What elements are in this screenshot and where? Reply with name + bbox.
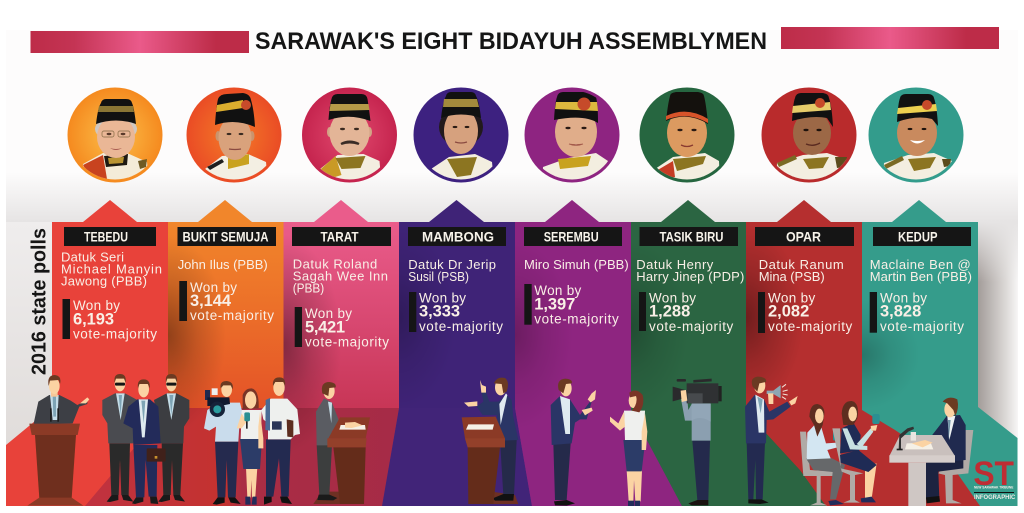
portrait: Bukit Semuja [186,88,282,183]
column: Opar [746,200,862,506]
man speaking [551,379,596,506]
text: Kedup [870,227,972,334]
floor: purple stage [382,408,532,506]
woman reporter [237,388,263,505]
text: Tebedu: Jawong (PBB) [61,274,147,289]
woman with microphone [610,390,647,506]
bodyguard right [154,374,189,502]
text: Opar: Mina (PSB) [759,269,825,284]
text: Serembu: vote-majority [534,311,619,326]
text: Kedup: vote-majority [880,319,964,334]
text: Opar: 2,082 [768,303,809,321]
column: Tasik Biru [631,200,746,506]
text: Tasik Biru: Datuk Henry [636,257,714,272]
text: Tebedu: vote-majority [73,326,157,341]
text: Mambong: Susil (PSB) [408,269,469,284]
text: Tasik Biru: 1,288 [649,303,690,321]
portrait: Opar [762,88,856,183]
floor: green stage [631,410,826,506]
logo: ST infographic: INFOGRAPHIC [974,495,1016,501]
bodyguard left [102,374,137,502]
seated woman two [832,401,880,503]
text: Opar [755,227,854,334]
text: Tarat: Datuk Roland [293,257,377,272]
speaker at podium [27,375,89,506]
floor: red stage [85,408,399,506]
text: Bukit Semuja [178,227,276,323]
text: Tebedu: Michael Manyin [61,262,162,277]
portrait: Mambong [414,88,508,183]
floor: red interview stage [746,410,980,506]
text: Serembu: SEREMBU [544,228,599,244]
text: Kedup: Maclaine Ben @ [870,257,971,272]
text: Mambong: Won by [419,291,466,306]
text: Bukit Semuja: 3,144 [190,292,232,310]
text: Tebedu: TEBEDU [84,228,128,244]
logo: ST infographic: NEW SARAWAK TRIBUNE [974,485,1014,489]
text: Tasik Biru: Won by [649,291,696,306]
man with megaphone [745,377,798,504]
portrait: Kedup [868,88,964,183]
column: Mambong [399,200,516,506]
column: Tebedu [6,200,168,506]
column: Tarat [284,200,400,506]
text: Tebedu: 6,193 [73,310,114,328]
right title bar [781,27,999,49]
text: Opar: OPAR [786,228,821,244]
cameraman from behind [673,379,722,505]
text: Tarat [292,227,391,350]
text: Tebedu [61,227,162,341]
portrait: Tasik Biru [640,88,734,183]
bodyguard centre [123,379,166,504]
man writing at podium [313,382,370,504]
text: Tasik Biru [636,227,744,334]
man with satchel [261,377,300,505]
title: SARAWAK'S EIGHT BIDAYUH ASSEMBLYMEN [255,28,767,55]
text: Tasik Biru: Harry Jinep (PDP) [636,269,744,284]
text: Tebedu: Datuk Seri [61,250,124,265]
people group middle right [610,377,798,506]
text: Mambong: 3,333 [419,303,460,321]
text: Bukit Semuja: BUKIT SEMUJA [182,228,268,244]
portrait: Serembu [524,88,620,183]
text: Bukit Semuja: John Ilus (PBB) [178,257,268,272]
text: Kedup: Martin Ben (PBB) [870,269,972,284]
people group left [27,374,189,506]
text: Kedup: Won by [880,291,927,306]
text: Tarat: Sagah Wee Inn [293,269,388,284]
text: Mambong: MAMBONG [422,228,494,244]
column edge shadows [168,225,977,455]
text: Opar: vote-majority [768,319,853,334]
text: Tarat: Won by [305,306,352,321]
column: Bukit Semuja [168,200,284,506]
people group middle left [204,377,370,505]
text: Bukit Semuja: vote-majority [190,308,274,323]
people group middle [462,378,596,506]
column: Kedup [862,200,1018,506]
text: Opar: Won by [768,291,816,306]
people group right [800,398,1016,506]
text: Tarat: vote-majority [305,335,389,350]
seated woman one [800,404,845,505]
left title bar [30,31,249,53]
text: Tasik Biru: vote-majority [649,319,734,334]
text: Kedup: KEDUP [898,228,938,244]
text: Tebedu: Won by [73,298,120,313]
text: Tasik Biru: TASIK BIRU [660,228,724,244]
portrait: Tarat [302,88,397,183]
text: Tarat: 5,421 [305,319,345,337]
portrait: Tebedu [68,88,162,183]
podium man [462,378,518,504]
text: Serembu [524,227,629,326]
text: Bukit Semuja: Won by [190,280,237,295]
text: Serembu: Won by [534,283,582,298]
side label: 2016 state polls [28,228,50,375]
text: Kedup: 3,828 [880,303,921,321]
text: Serembu: 1,397 [534,295,575,313]
column: Serembu [515,200,631,506]
cameraman [204,381,243,505]
text: Mambong: vote-majority [419,319,503,334]
floor: magenta stage [515,408,682,506]
logo: ST infographic: ST [973,455,1014,493]
text: Serembu: Miro Simuh (PBB) [524,257,629,272]
text: Tarat: (PBB) [293,281,324,296]
text: Mambong: Datuk Dr Jerip [408,257,496,272]
interviewee at table [889,398,973,506]
text: Mambong [408,227,506,334]
text: Tarat: TARAT [320,228,359,244]
text: Opar: Datuk Ranum [759,257,844,272]
